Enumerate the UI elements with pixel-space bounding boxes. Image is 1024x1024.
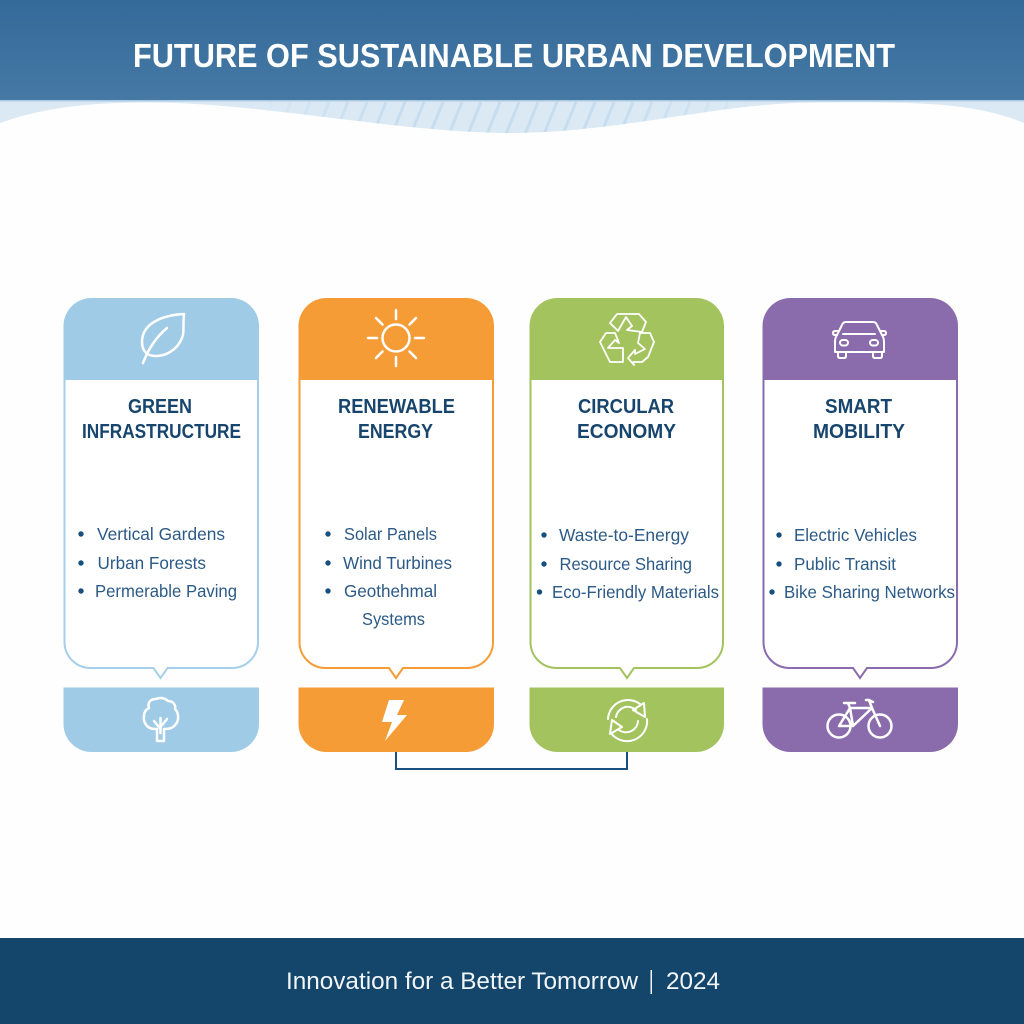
feature list	[537, 525, 719, 602]
card header	[530, 298, 724, 380]
panel: circular economy	[530, 298, 724, 752]
wave band	[0, 102, 1024, 145]
connector line	[396, 752, 627, 769]
panel: renewable energy	[298, 298, 494, 752]
card header	[298, 298, 494, 380]
feature list: Permerable Paving	[95, 581, 237, 601]
footer bar	[0, 938, 1024, 1024]
icon: recycle	[600, 314, 654, 365]
icon: bicycle	[828, 700, 892, 738]
icon: car	[833, 322, 886, 358]
footer block	[64, 688, 259, 752]
heading: MOBILITY	[813, 420, 905, 443]
feature list: Wind Turbines	[343, 553, 452, 573]
heading	[813, 395, 905, 443]
heading: INFRASTRUCTURE	[82, 420, 241, 443]
feature list: Electric Vehicles	[794, 525, 917, 545]
feature list: Urban Forests	[98, 553, 206, 573]
feature list: Bike Sharing Networks	[784, 582, 955, 602]
footer text: 2024	[666, 968, 720, 995]
panel: green infrastructure	[64, 298, 259, 752]
icon: refresh arrows	[608, 700, 647, 741]
heading: GREEN	[128, 395, 192, 418]
heading	[577, 395, 676, 443]
card outline	[764, 379, 957, 678]
title: FUTURE OF SUSTAINABLE URBAN DEVELOPMENT	[133, 38, 895, 75]
feature list: Eco-Friendly Materials	[552, 582, 719, 602]
heading: RENEWABLE	[338, 395, 455, 418]
heading: ENERGY	[358, 420, 433, 443]
card outline	[300, 379, 493, 678]
icon: leaf	[142, 314, 184, 363]
footer block	[298, 688, 494, 752]
feature list: Geothehmal	[344, 581, 437, 601]
card header	[762, 298, 958, 380]
feature list: Resource Sharing	[560, 554, 692, 574]
heading: SMART	[825, 395, 892, 418]
feature list	[325, 524, 452, 629]
icon: lightning bolt	[382, 700, 407, 741]
heading	[82, 395, 241, 443]
feature list: Solar Panels	[344, 524, 437, 544]
card header	[64, 298, 259, 380]
header banner	[0, 0, 1024, 102]
feature list: Vertical Gardens	[97, 524, 225, 544]
feature list	[78, 524, 237, 601]
feature list: Public Transit	[794, 554, 896, 574]
heading: CIRCULAR	[578, 395, 674, 418]
card outline	[64, 379, 258, 678]
footer text: Innovation for a Better Tomorrow	[286, 968, 639, 995]
feature list	[769, 525, 955, 602]
panel: smart mobility	[762, 298, 958, 752]
feature list: Waste-to-Energy	[559, 525, 689, 545]
icon: tree	[144, 698, 178, 741]
footer block	[530, 688, 724, 752]
footer block	[762, 688, 958, 752]
icon: sun	[368, 310, 424, 366]
heading: ECONOMY	[577, 420, 676, 443]
heading	[338, 395, 455, 443]
feature list: Systems	[362, 609, 425, 629]
card outline	[530, 379, 723, 678]
